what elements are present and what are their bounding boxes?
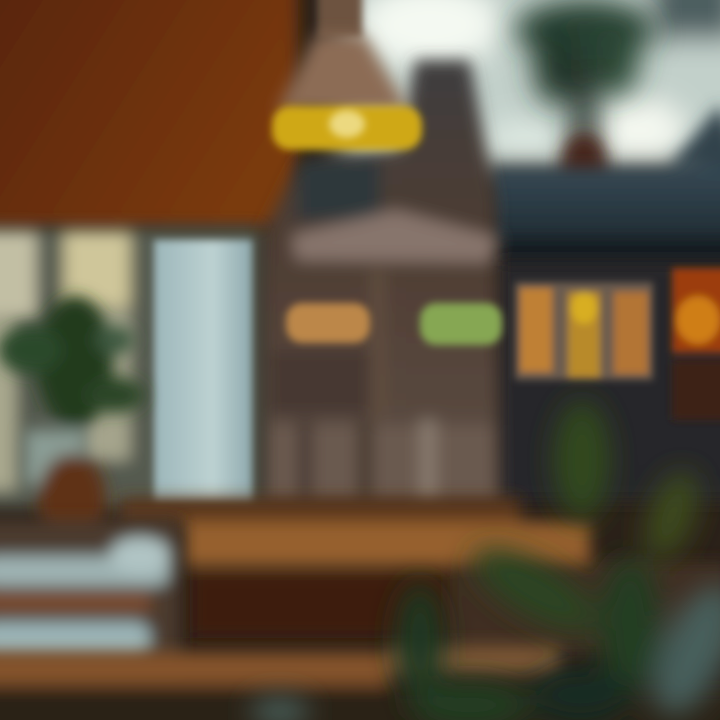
palm trunk base [560,132,608,204]
lit windows [515,268,720,420]
pendant lamp [272,0,422,150]
brick tower [262,60,500,505]
foreground plants [250,400,720,720]
hanging sign: orange [286,303,370,343]
wooden table [120,498,720,652]
wooden wall [0,0,298,228]
potted plant [0,296,145,546]
left windows [0,228,260,508]
hanging sign: green [420,303,502,345]
folded towels [0,520,180,670]
white column [154,240,252,502]
lower wooden shelf [0,645,720,720]
house wall right [498,262,720,502]
sky [340,0,720,170]
roof [490,105,720,266]
palm tree [515,0,655,150]
